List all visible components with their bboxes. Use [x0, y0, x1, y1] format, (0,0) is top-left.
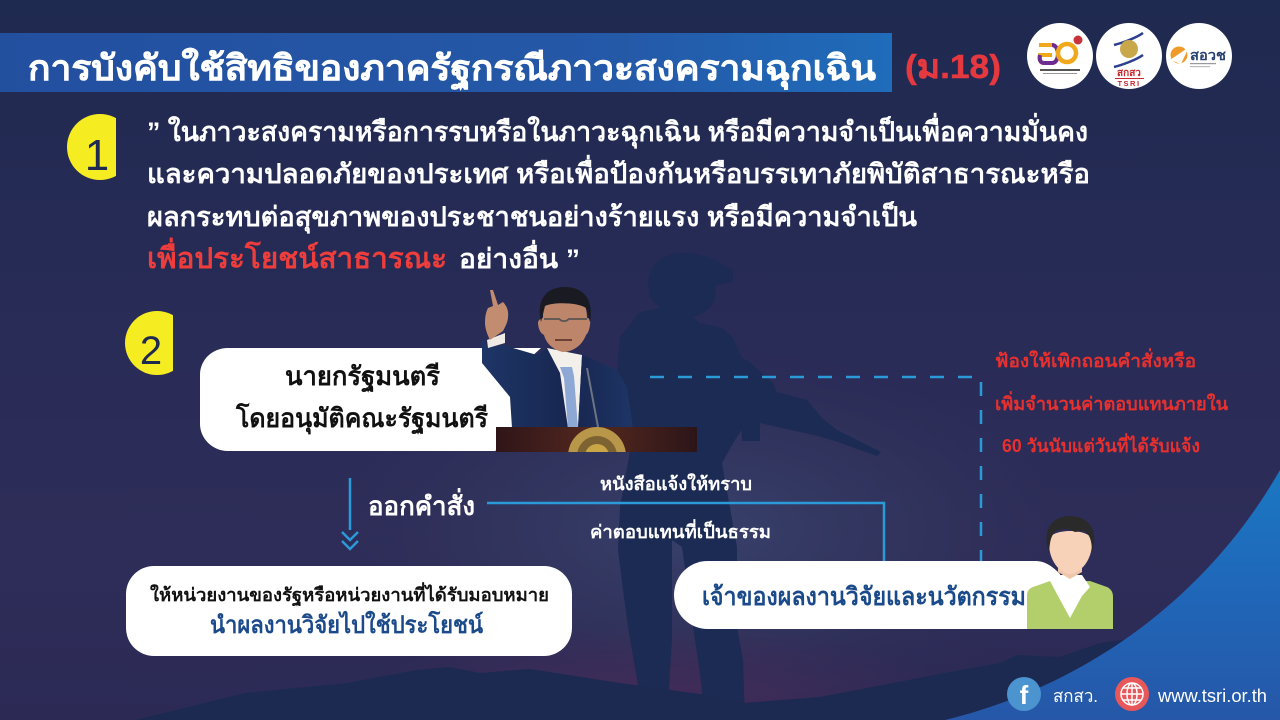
soldier body [617, 253, 750, 720]
hair [540, 287, 591, 322]
logo: TSRI [1096, 23, 1162, 89]
logo: NXPO [1166, 23, 1232, 89]
order label: ออกคำสั่ง [368, 487, 475, 521]
person icon [1027, 516, 1113, 629]
tie [560, 367, 578, 428]
collar [1050, 575, 1090, 618]
soldier rifle [740, 358, 881, 456]
face [538, 295, 590, 352]
compensation label: ค่าตอบแทนที่เป็นธรรม [590, 519, 771, 542]
shirt [547, 348, 582, 428]
quote line 3: ผลกระทบต่อสุขภาพของประชาชนอย่างร้ายแรง หรือมีความจำเป็น [147, 199, 918, 234]
face [1049, 531, 1092, 574]
podium seal [568, 427, 626, 452]
microphone [587, 368, 598, 427]
glasses [544, 319, 587, 321]
cabinet approval label: โดยอนุมัติคณะรัฐมนตรี [235, 402, 488, 436]
logo: NXPO: สอวช [1190, 47, 1227, 63]
website: www.tsri.or.th [1157, 686, 1267, 706]
arrow: down to agency [342, 478, 358, 549]
red condition text [995, 348, 1229, 456]
hair [1047, 516, 1094, 552]
icon: globe [1115, 677, 1149, 711]
number badge 2 [125, 311, 173, 375]
panel: agency box [126, 566, 572, 656]
blue corner curve [945, 470, 1280, 720]
title: การบังคับใช้สิทธิของภาครัฐกรณีภาวะสงครามฉุกเฉิน [28, 47, 876, 91]
quote text block [147, 112, 1090, 275]
icon: facebook [1007, 677, 1041, 711]
quote line 4 ending: อย่างอื่น ” [459, 239, 580, 274]
arrow: order to owner [487, 503, 884, 562]
agency line: ให้หน่วยงานของรัฐหรือหน่วยงานที่ได้รับมอบหมาย [150, 582, 549, 607]
condition line 2: เพิ่มจำนวนค่าตอบแทนภายใน [995, 391, 1229, 414]
quote line 2: และความปลอดภัยของประเทศ หรือเพื่อป้องกันหรือบรรเทาภัยพิบัติสาธารณะหรือ [147, 154, 1090, 189]
logo: 60 years [1027, 23, 1093, 89]
sweater [1027, 581, 1113, 629]
number badge 1 [67, 114, 116, 180]
use research line: นำผลงานวิจัยไปใช้ประโยชน์ [210, 610, 484, 639]
quote line 4 highlighted: เพื่อประโยชน์สาธารณะ [147, 237, 447, 275]
podium [496, 427, 697, 452]
raised hand [485, 290, 508, 340]
logo group [1027, 23, 1232, 89]
panel: prime minister box [200, 348, 541, 451]
cuff [487, 333, 505, 348]
footer [1007, 677, 1267, 711]
suit [482, 338, 633, 428]
icon: facebook: f [1020, 680, 1029, 710]
logo: TSRI: สกสว [1117, 68, 1141, 79]
neck [1058, 565, 1082, 579]
prime minister label: นายกรัฐมนตรี [285, 361, 440, 394]
mouth [555, 339, 572, 341]
facebook label: สกสว. [1053, 686, 1098, 706]
panel: owner box [674, 561, 1065, 629]
article label: (ม.18) [905, 48, 1001, 85]
notice label: หนังสือแจ้งให้ทราบ [600, 473, 752, 494]
condition line 1: ฟ้องให้เพิกถอนคำสั่งหรือ [995, 348, 1196, 371]
title bar [0, 33, 892, 92]
logo: TSRI: TSRI [1117, 79, 1141, 88]
quote line 1: ” ในภาวะสงครามหรือการรบหรือในภาวะฉุกเฉิน หรือมีความจำเป็นเพื่อความมั่นคง [147, 112, 1088, 149]
number badge 1: 1 [85, 131, 109, 180]
dashed connector [650, 377, 981, 565]
bottom mountain silhouette [135, 638, 1135, 720]
soldier silhouette [617, 253, 881, 720]
lapel [578, 356, 590, 428]
prime minister figure [482, 287, 633, 428]
condition line 3: 60 วันนับแต่วันที่ได้รับแจ้ง [1002, 433, 1200, 456]
number badge 2: 2 [140, 329, 162, 373]
owner label: เจ้าของผลงานวิจัยและนวัตกรรม [702, 583, 1026, 611]
